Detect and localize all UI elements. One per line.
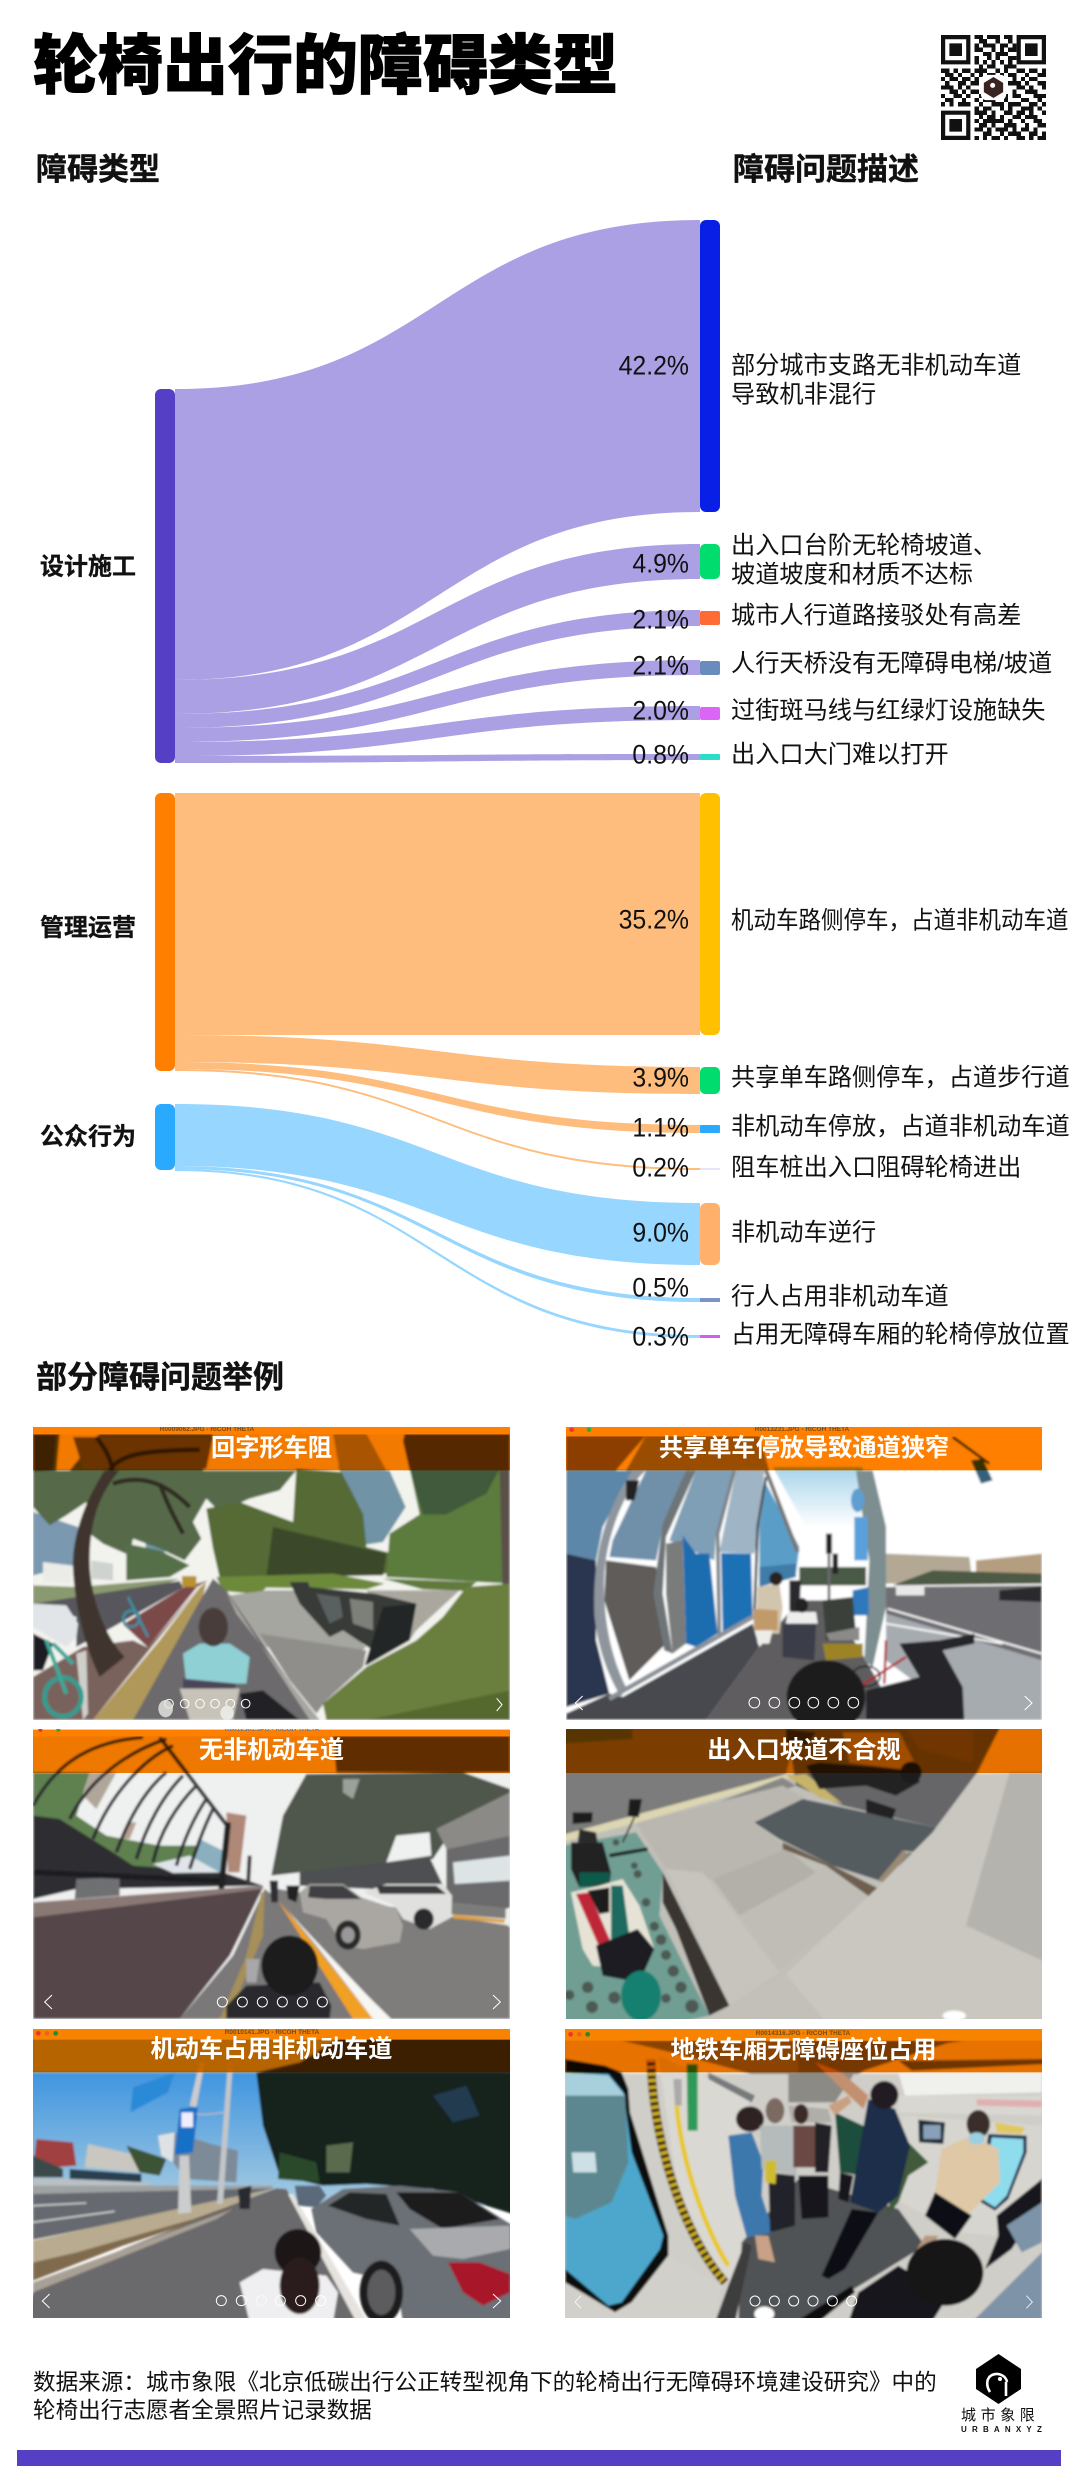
photo caption: 共享单车停放导致通道狭窄 — [659, 1435, 949, 1462]
barrier description labels: 占用无障碍车厢的轮椅停放位置 — [731, 1322, 1070, 1348]
barrier description labels: 出入口大门难以打开 — [731, 742, 949, 768]
barrier description labels: 过街斑马线与红绿灯设施缺失 — [731, 698, 1045, 724]
flows: design and construction — [175, 220, 700, 763]
source labels — [40, 554, 136, 1150]
percentage labels: 4.9% — [632, 549, 689, 579]
percentage labels — [619, 351, 689, 1352]
percentage labels: 42.2% — [619, 351, 689, 381]
flows: management and operation — [175, 793, 700, 1170]
percentage labels: 0.2% — [632, 1153, 689, 1183]
data source note: 数据来源：城市象限《北京低碳出行公正转型视角下的轮椅出行无障碍环境建设研究》中的 — [33, 2370, 937, 2395]
photo caption: 无非机动车道 — [199, 1737, 344, 1764]
barrier description labels: 出入口台阶无轮椅坡道、 — [731, 532, 997, 560]
barrier description labels: 城市人行道路接驳处有高差 — [731, 602, 1021, 630]
percentage labels: 2.1% — [632, 605, 689, 635]
logo: UrbanXYZ — [961, 2354, 1047, 2434]
photo: metro accessible seat occupied — [565, 2029, 1042, 2318]
percentage labels: 3.9% — [632, 1063, 689, 1093]
barrier description labels: 行人占用非机动车道 — [731, 1284, 949, 1310]
data source note — [33, 2370, 937, 2423]
percentage labels: 2.0% — [632, 696, 689, 726]
barrier description labels: 共享单车路侧停车，占道步行道 — [731, 1064, 1070, 1092]
photo caption: 出入口坡道不合规 — [707, 1737, 901, 1764]
barrier description labels: 导致机非混行 — [731, 382, 876, 408]
source labels: 管理运营 — [40, 914, 136, 942]
photo file name: R0014316.JPG - RICOH THETA — [756, 2030, 850, 2037]
percentage labels: 35.2% — [619, 905, 689, 935]
percentage labels: 0.5% — [632, 1273, 689, 1303]
barrier description labels — [731, 352, 1070, 1348]
logo latin wordmark: URBANXYZ — [961, 2425, 1047, 2434]
heading: barrier type: 障碍类型 — [36, 152, 160, 187]
source nodes — [155, 389, 175, 1170]
source labels: 设计施工 — [40, 554, 136, 580]
photo caption: 地铁车厢无障碍座位占用 — [670, 2037, 937, 2064]
barrier description labels: 人行天桥没有无障碍电梯/坡道 — [731, 650, 1052, 678]
barrier description labels: 非机动车逆行 — [731, 1220, 876, 1246]
heading: barrier description: 障碍问题描述 — [733, 152, 919, 187]
percentage labels: 9.0% — [632, 1218, 689, 1248]
target nodes — [700, 220, 720, 1338]
barrier description labels: 坡道坡度和材质不达标 — [731, 562, 973, 588]
heading: examples: 部分障碍问题举例 — [36, 1360, 284, 1395]
barrier description labels: 非机动车停放，占道非机动车道 — [731, 1114, 1070, 1140]
percentage labels: 0.8% — [632, 740, 689, 770]
photo: shared bikes narrowing the passage — [566, 1427, 1042, 1720]
barrier description labels: 阻车桩出入口阻碍轮椅进出 — [731, 1154, 1021, 1182]
source labels: 公众行为 — [40, 1124, 136, 1150]
photo: hui-shaped bollard — [33, 1427, 510, 1720]
photo file name: R0010141.JPG - RICOH THETA — [225, 2029, 319, 2036]
sankey chart — [40, 220, 1070, 1352]
percentage labels: 0.3% — [632, 1322, 689, 1352]
photo: non-compliant entrance ramp — [566, 1729, 1042, 2019]
barrier description labels: 机动车路侧停车，占道非机动车道 — [731, 907, 1068, 933]
photo: no non-motorized lane — [33, 1729, 510, 2019]
flows: public behaviour — [175, 1104, 700, 1338]
barrier description labels: 部分城市支路无非机动车道 — [731, 352, 1021, 380]
data source note: 轮椅出行志愿者全景照片记录数据 — [33, 2398, 372, 2423]
percentage labels: 1.1% — [632, 1113, 689, 1143]
bottom bar — [17, 2450, 1061, 2466]
photo: cars occupying non-motorized lane — [33, 2029, 510, 2318]
photo caption: 回字形车阻 — [211, 1435, 332, 1462]
title: 轮椅出行的障碍类型 — [33, 29, 618, 102]
logo wordmark: 城市象限 — [961, 2407, 1039, 2424]
QR code — [941, 35, 1046, 140]
photo caption: 机动车占用非机动车道 — [151, 2036, 392, 2063]
percentage labels: 2.1% — [632, 651, 689, 681]
